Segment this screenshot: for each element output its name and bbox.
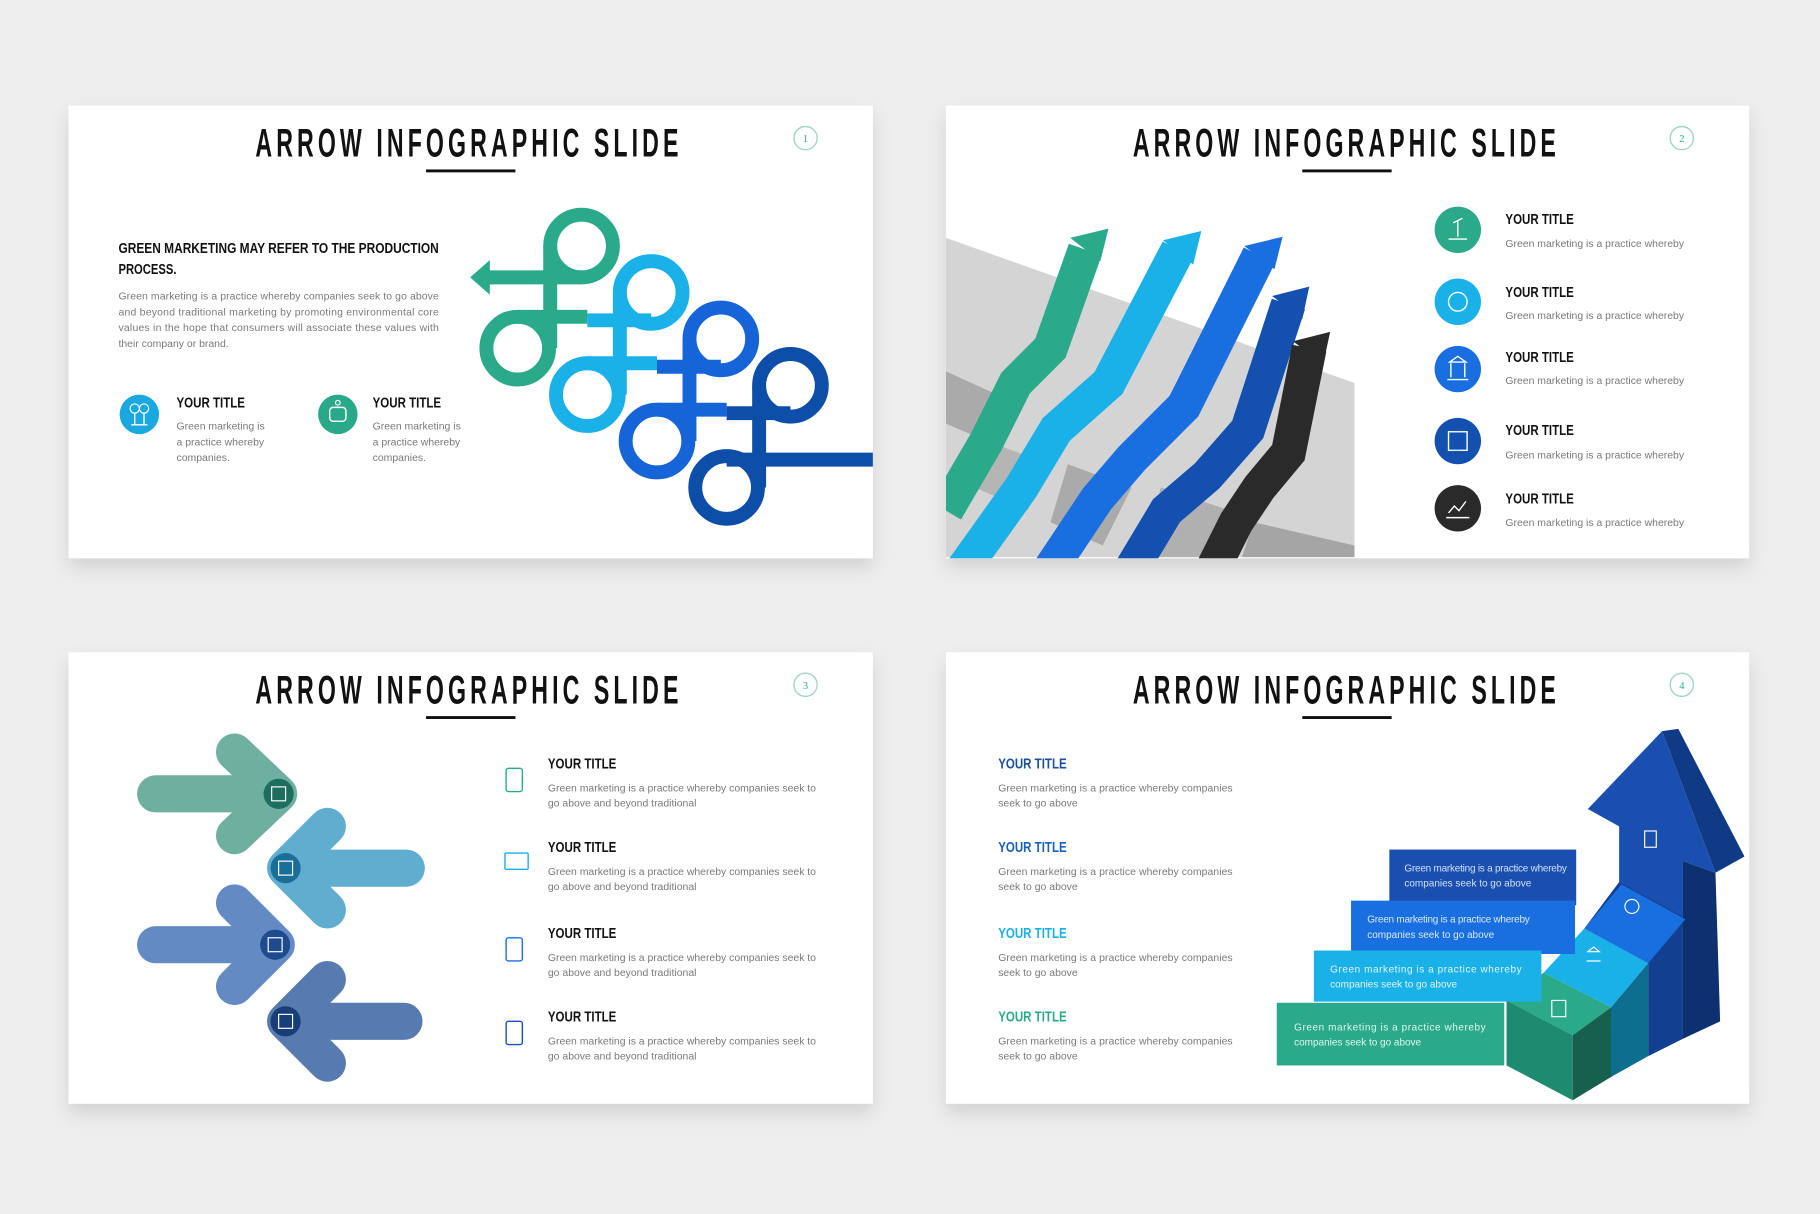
paragraph: values in the hope that consumers will associate these values with	[118, 323, 439, 334]
list items: seek to go above	[998, 968, 1078, 979]
paragraph: Green marketing is a practice whereby companies seek to go above	[118, 291, 439, 302]
list items: YOUR TITLE	[998, 839, 1067, 856]
list items	[1435, 207, 1685, 532]
list items: Green marketing is a practice whereby	[1505, 239, 1685, 250]
paragraph: and beyond traditional marketing by promoting environmental core	[118, 308, 439, 319]
list items: YOUR TITLE	[548, 925, 616, 942]
page number	[794, 673, 817, 696]
item 2: a practice whereby	[373, 438, 461, 449]
list items: go above and beyond traditional	[548, 799, 696, 810]
list items: Green marketing is a practice whereby companies seek to	[548, 867, 816, 878]
page number: 2	[1679, 134, 1684, 145]
bars: Green marketing is a practice whereby	[1404, 864, 1567, 875]
paragraph: their company or brand.	[118, 339, 229, 350]
list items: YOUR TITLE	[1505, 211, 1574, 228]
panel: slide 4	[946, 652, 1749, 1104]
panel: slide 3	[69, 652, 873, 1104]
paragraph	[118, 291, 439, 350]
item 2: Green marketing is	[373, 421, 461, 432]
list items: Green marketing is a practice whereby companies	[998, 784, 1233, 795]
icon: plants	[120, 395, 159, 434]
list items: Green marketing is a practice whereby companies seek to	[548, 1037, 816, 1048]
item 1: a practice whereby	[176, 438, 265, 449]
bars	[1389, 850, 1576, 905]
page number: 3	[803, 681, 808, 692]
item 2	[373, 394, 461, 464]
list items	[998, 755, 1233, 1063]
chart: chevron arrows	[156, 752, 406, 1063]
list items: Green marketing is a practice whereby companies seek to	[548, 953, 816, 964]
chart: 3D stair arrow: companies seek to go above	[1294, 1038, 1422, 1049]
list items: Green marketing is a practice whereby	[1505, 376, 1685, 387]
list items: Green marketing is a practice whereby companies	[998, 1037, 1233, 1048]
list items: go above and beyond traditional	[548, 1052, 696, 1063]
chart: 3D stair arrow	[1277, 729, 1744, 1100]
bars: companies seek to go above	[1404, 879, 1532, 890]
list items: Green marketing is a practice whereby	[1505, 311, 1685, 322]
list items: go above and beyond traditional	[548, 882, 696, 893]
panel: slide 1: PROCESS.	[118, 261, 176, 278]
list items: YOUR TITLE	[548, 839, 616, 856]
list items: YOUR TITLE	[1505, 284, 1574, 301]
panel: slide 2	[946, 106, 1749, 569]
page number	[794, 127, 817, 150]
panel: slide 1	[69, 106, 873, 558]
list items: YOUR TITLE	[1505, 422, 1574, 439]
chart: stair arrows	[946, 229, 1355, 569]
chart: 3D stair arrow: companies seek to go above	[1330, 980, 1458, 991]
list items: Green marketing is a practice whereby companies	[998, 953, 1233, 964]
item 1	[176, 394, 265, 464]
chart: 3D stair arrow: companies seek to go above	[1367, 930, 1495, 941]
icon: piggy	[318, 395, 358, 434]
chart: 3D stair arrow: Green marketing is a practice whereby	[1367, 915, 1530, 926]
list items: YOUR TITLE	[998, 755, 1067, 772]
list items: YOUR TITLE	[1505, 491, 1574, 508]
title: ARROW INFOGRAPHIC SLIDE	[255, 668, 683, 712]
item 2: companies.	[373, 453, 426, 464]
page number	[1670, 673, 1693, 696]
list items: seek to go above	[998, 1052, 1078, 1063]
list items: go above and beyond traditional	[548, 968, 696, 979]
list items: YOUR TITLE	[1505, 349, 1574, 366]
list items: seek to go above	[998, 799, 1078, 810]
title: ARROW INFOGRAPHIC SLIDE	[255, 122, 683, 166]
list items: seek to go above	[998, 882, 1078, 893]
list items: YOUR TITLE	[548, 755, 616, 772]
list items: Green marketing is a practice whereby companies seek to	[548, 784, 816, 795]
item 1: YOUR TITLE	[176, 394, 245, 411]
item 1: Green marketing is	[176, 421, 265, 432]
list items: Green marketing is a practice whereby	[1505, 450, 1685, 461]
chart: 3D stair arrow: Green marketing is a practice whereby	[1330, 965, 1522, 976]
heading text: GREEN MARKETING MAY REFER TO THE PRODUCTION	[118, 240, 439, 257]
page number: 4	[1679, 681, 1685, 692]
list items: Green marketing is a practice whereby companies	[998, 867, 1233, 878]
list items: Green marketing is a practice whereby	[1505, 518, 1685, 529]
chart: 3D stair arrow: Green marketing is a practice whereby	[1294, 1023, 1486, 1034]
list items: YOUR TITLE	[548, 1008, 616, 1025]
list items	[505, 755, 816, 1063]
chart: loop arrows	[470, 215, 873, 519]
icons on arrows	[260, 779, 301, 1036]
list items: YOUR TITLE	[998, 925, 1067, 942]
item 2: YOUR TITLE	[373, 394, 441, 411]
page number	[1670, 127, 1693, 150]
list items: YOUR TITLE	[998, 1008, 1067, 1025]
page number: 1	[803, 134, 808, 145]
item 1: companies.	[176, 453, 230, 464]
